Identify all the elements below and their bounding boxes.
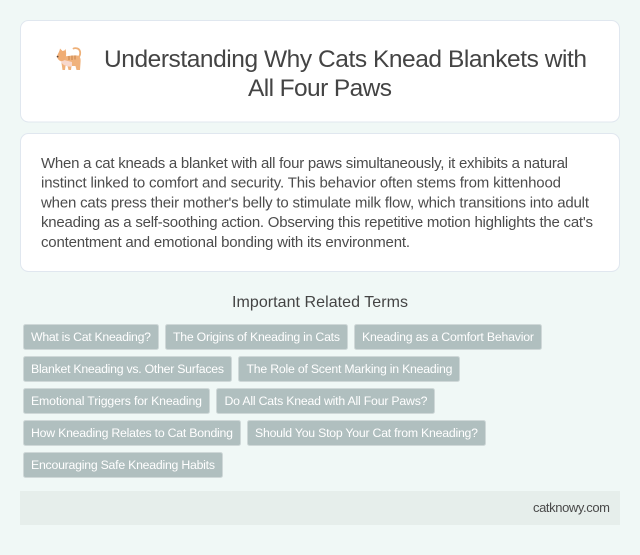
tag: Blanket Kneading vs. Other Surfaces xyxy=(31,362,224,376)
tag: What is Cat Kneading? xyxy=(31,330,151,344)
text block: description xyxy=(40,155,593,251)
footer credit: catknowy.com xyxy=(533,500,610,515)
tag: How Kneading Relates to Cat Bonding xyxy=(31,426,233,440)
tag: Kneading as a Comfort Behavior xyxy=(362,330,534,344)
title: Understanding Why Cats Knead Blankets with xyxy=(104,46,587,73)
tag: Should You Stop Your Cat from Kneading? xyxy=(255,426,478,440)
panel: description xyxy=(20,134,620,272)
tag xyxy=(216,388,434,414)
tag xyxy=(24,324,158,350)
tag xyxy=(238,356,460,382)
text block: description: instinct linked to comfort and security. This behavior often stems from kittenhood xyxy=(41,174,561,192)
text block: description: when cats press their mother's belly to stimulate milk flow, which transitions into adult xyxy=(40,194,590,212)
footer xyxy=(20,491,620,525)
tag xyxy=(24,420,240,446)
text block: description: kneading as a self-soothing action. Observing this repetitive motion highlights the cat's xyxy=(41,214,593,231)
text block: description: contentment and emotional bonding with its environment. xyxy=(41,234,410,251)
tag: Do All Cats Knead with All Four Paws? xyxy=(224,394,428,408)
heading: related terms: Important Related Terms xyxy=(232,294,408,311)
tag xyxy=(24,452,222,478)
tag: Encouraging Safe Kneading Habits xyxy=(31,458,215,472)
tag: The Role of Scent Marking in Kneading xyxy=(246,362,453,376)
title xyxy=(104,46,587,102)
tag xyxy=(354,324,542,350)
panel: title card xyxy=(20,20,620,122)
tag xyxy=(24,388,210,414)
icon: cat xyxy=(57,48,81,70)
tag xyxy=(24,356,232,382)
tag xyxy=(248,420,486,446)
text block: description: When a cat kneads a blanket with all four paws simultaneously, it exhibits a natural xyxy=(41,155,568,172)
tag list xyxy=(24,324,542,478)
title: All Four Paws xyxy=(248,75,392,102)
tag xyxy=(166,324,348,350)
tag: The Origins of Kneading in Cats xyxy=(173,330,340,344)
tag: Emotional Triggers for Kneading xyxy=(31,394,202,408)
